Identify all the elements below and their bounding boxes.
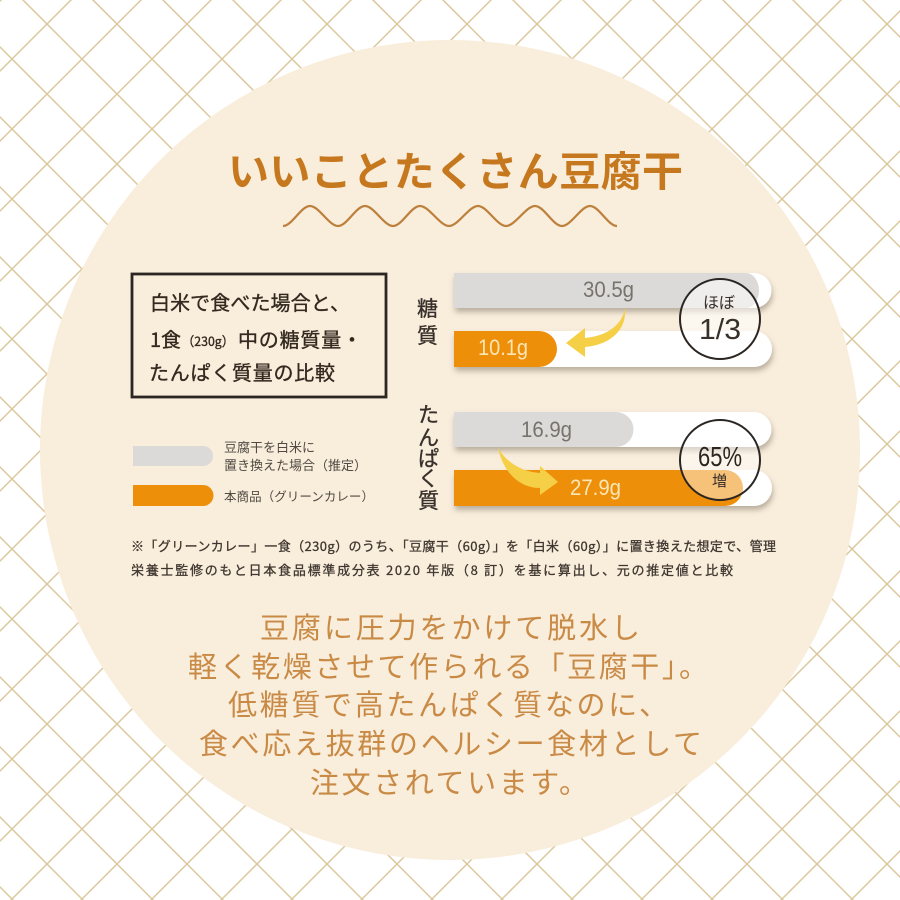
label: たんぱく質: 質 <box>418 485 439 515</box>
callout: 65% 増 <box>680 420 760 500</box>
comparison heading box: （230g） <box>182 331 234 350</box>
legend: gray swatch <box>133 446 213 466</box>
arrow: sugar decrease <box>566 308 625 357</box>
chart: protein bars <box>454 412 772 506</box>
body text: 注文されています。 <box>310 760 588 802</box>
body text: 低糖質で高たんぱく質なのに、 <box>228 682 668 724</box>
body text <box>188 605 708 802</box>
comparison heading box: 1食 <box>150 324 181 353</box>
callout: ほぼ 1/3: ほぼ <box>703 289 735 313</box>
label: たんぱく質 <box>418 399 439 515</box>
legend: gray label: 置き換えた場合（推定） <box>224 455 367 474</box>
footnote: ※「グリーンカレー」一食（230g）のうち、「豆腐干（60g）」を「白米（60g）」に置き換えた想定で、管理 <box>131 536 776 555</box>
label: 糖質 <box>417 293 438 350</box>
value: 10.1g: 10.1g <box>478 335 528 360</box>
label: たんぱく質: た <box>418 399 439 429</box>
comparison heading box: 中の糖質量・ <box>238 324 362 353</box>
callout: 65% 増: 65% <box>698 441 742 472</box>
wavy underline <box>283 206 617 226</box>
label: たんぱく質: ぱ <box>418 443 439 473</box>
legend <box>133 437 374 506</box>
footnote: 栄養士監修のもと日本食品標準成分表 2020 年版（8 訂）を基に算出し、元の推定値と比較 <box>131 560 733 579</box>
legend: gray label: 豆腐干を白米に <box>224 437 315 456</box>
body text: 軽く乾燥させて作られる「豆腐干」。 <box>188 644 708 686</box>
footnote <box>131 536 776 579</box>
label: たんぱく質: ん <box>418 422 439 452</box>
value: 16.9g: 16.9g <box>521 417 572 442</box>
title: いいことたくさん豆腐干 <box>228 138 683 198</box>
comparison heading box: 白米で食べた場合と、 <box>150 287 350 316</box>
comparison heading box <box>132 274 386 397</box>
legend: orange swatch <box>133 485 214 506</box>
label: 糖質: 糖 <box>417 293 438 323</box>
callout: ほぼ 1/3 <box>680 279 760 359</box>
value: 30.5g: 30.5g <box>583 277 634 302</box>
comparison heading box: たんぱく質量の比較 <box>149 357 335 386</box>
label: 糖質: 質 <box>417 320 438 350</box>
body text: 豆腐に圧力をかけて脱水し <box>260 605 640 647</box>
value: 27.9g: 27.9g <box>570 475 621 500</box>
legend: orange label: 本商品（グリーンカレー） <box>224 486 374 505</box>
callout: ほぼ 1/3: 1/3 <box>699 314 741 346</box>
arrow: protein increase <box>498 447 558 495</box>
body text: 食べ応え抜群のヘルシー食材として <box>199 721 702 763</box>
callout: 65% 増: 増 <box>712 470 727 491</box>
chart: sugar bars <box>454 273 772 367</box>
label: たんぱく質: く <box>418 463 439 493</box>
